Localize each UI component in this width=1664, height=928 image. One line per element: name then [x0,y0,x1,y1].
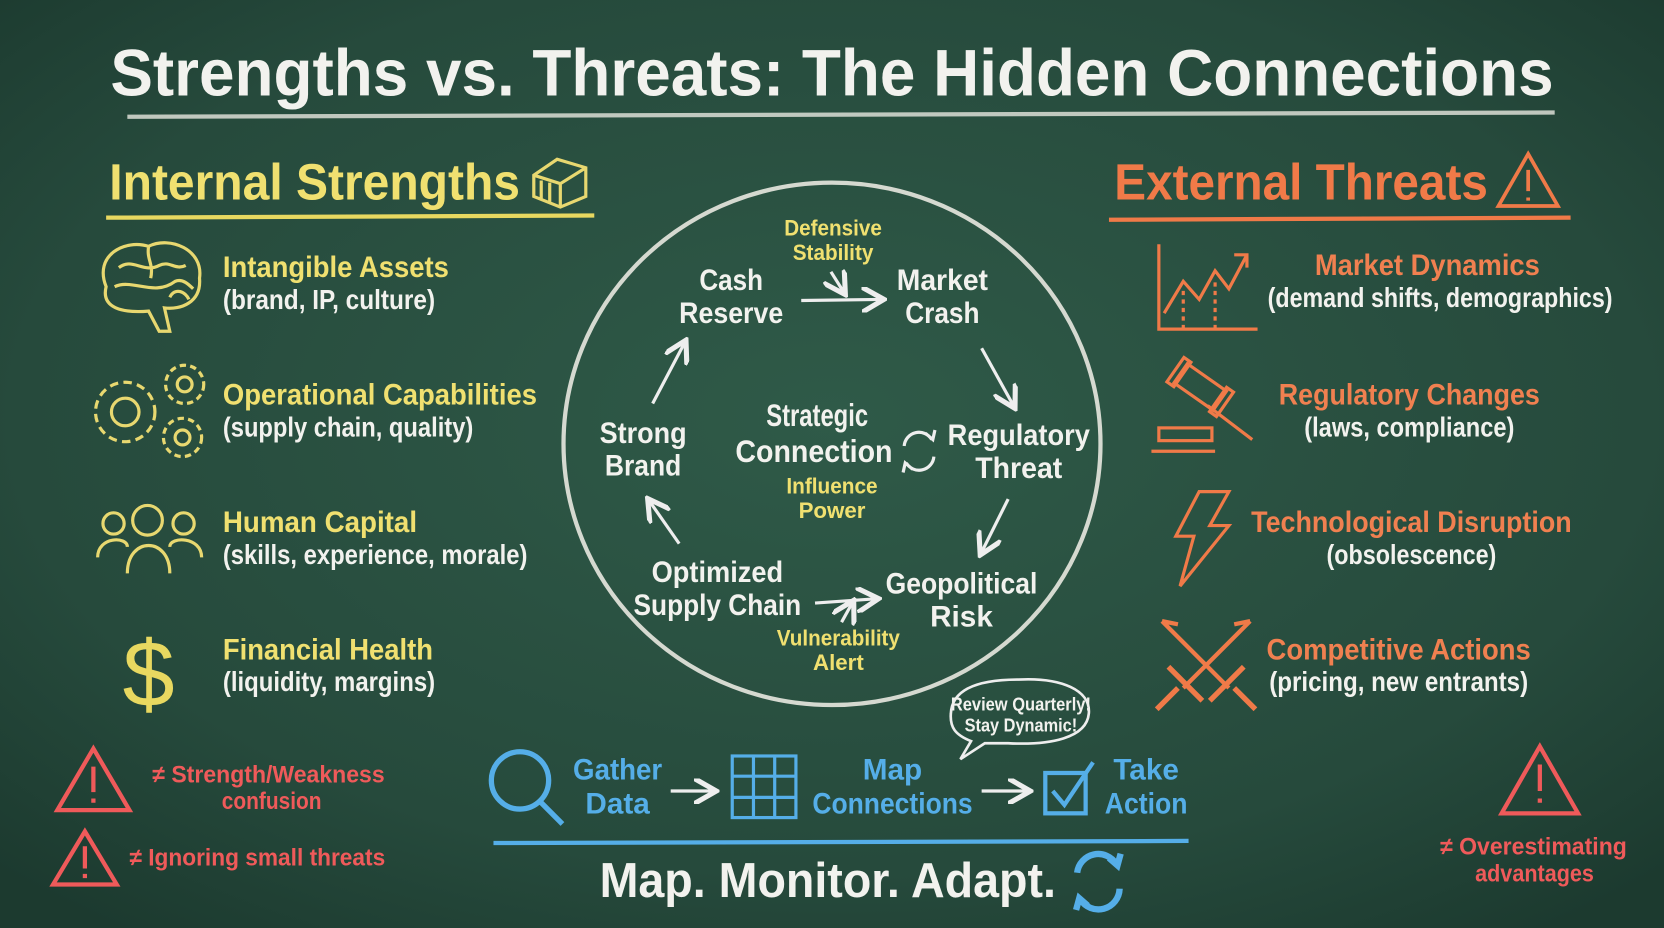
text: market dynamics: Market Dynamics [1315,249,1540,282]
process flow: Connections [812,787,973,820]
callout: review quarterly [951,679,1091,759]
text: competitive actions: Competitive Actions [1267,633,1531,666]
labels: yellow notes: Power [799,498,866,523]
node: market crash [897,264,988,330]
node: optimized supply chain: Optimized [652,556,783,589]
node: optimized supply chain [634,556,801,622]
text: competitive actions [1267,633,1531,697]
icon: swords [1157,621,1255,709]
icon: chart [1159,244,1258,329]
text: operational capabilities [223,379,537,442]
node: regulatory threat [948,419,1090,485]
text: intangible assets [223,251,449,315]
icon: brain [103,243,200,331]
text: confusion warning [152,762,385,815]
text: technological disruption: Technological Disruption [1251,506,1572,539]
text: regulatory changes [1279,379,1540,442]
text: regulatory changes: (laws, compliance) [1304,411,1514,442]
process flow: Data [585,787,650,820]
icon: gavel [1151,357,1252,451]
callout: review quarterly: Stay Dynamic! [965,716,1077,736]
text: financial health: Financial Health [223,633,433,666]
node: cash reserve: Reserve [679,297,783,330]
process flow: Action [1105,787,1188,820]
text: human capital: (skills, experience, morale) [223,539,527,570]
text: technological disruption [1251,506,1572,570]
node: cash reserve [679,264,783,330]
icon: lightning [1176,492,1229,586]
connection circle diagram [564,183,1100,705]
warning right [1440,746,1627,887]
labels: yellow notes: Vulnerability [777,626,900,651]
text: human capital: Human Capital [223,506,417,539]
warning right: ≠ Overestimating [1440,834,1627,861]
process flow: Gather [573,753,663,786]
node: geopolitical risk: Risk [930,600,993,633]
labels: yellow notes: Defensive [784,216,882,241]
text: intangible assets: (brand, IP, culture) [223,284,435,315]
threat items [1151,244,1613,709]
node: strong brand [600,417,687,483]
node: market crash: Crash [905,297,980,330]
text: competitive actions: (pricing, new entrants) [1269,666,1528,697]
process flow: Take [1113,753,1179,786]
icon: magnifier [491,752,562,824]
node: market crash: Market [897,264,988,297]
icon: dollar: $ [123,621,175,726]
text: financial health: (liquidity, margins) [223,666,435,697]
process flow [491,752,1189,843]
text: regulatory changes: Regulatory Changes [1279,379,1540,412]
node: optimized supply chain: Supply Chain [634,589,801,622]
center: strategic connection: Strategic [766,397,868,433]
warning right: advantages [1475,860,1594,887]
icon: people [98,505,202,573]
text: small threats warning: ≠ Ignoring small threats [129,844,385,871]
arrows [649,272,1013,622]
node: regulatory threat: Threat [975,452,1062,485]
icon: gears [96,365,204,457]
node: geopolitical risk: Geopolitical [886,568,1037,601]
node: regulatory threat: Regulatory [948,419,1090,452]
text: technological disruption: (obsolescence) [1327,539,1496,570]
center: strategic connection [735,397,935,472]
text: human capital [223,506,527,570]
node: cash reserve: Cash [699,264,763,297]
labels: yellow notes: Alert [813,650,864,675]
text: confusion warning: confusion [222,788,322,815]
warnings left [53,749,385,884]
labels: yellow notes [777,216,900,675]
node: geopolitical risk [886,568,1037,633]
icon: checkbox [1045,762,1093,813]
node: strong brand: Strong [600,417,687,450]
footer slogan: Map. Monitor. Adapt. [600,854,1056,908]
text: operational capabilities: Operational Capabilities [223,379,537,412]
process flow: Map [863,753,922,786]
heading: external threats: External Threats [1114,154,1488,211]
text: intangible assets: Intangible Assets [223,251,449,284]
labels: yellow notes: Stability [793,240,874,265]
node: strong brand: Brand [605,450,681,483]
callout: review quarterly: Review Quarterly! [951,694,1091,714]
text: confusion warning: ≠ Strength/Weakness [152,762,385,789]
strength items [96,243,537,726]
heading: internal strengths: Internal Strengths [109,154,520,211]
title: Strengths vs. Threats: The Hidden Connections [110,36,1554,110]
labels: yellow notes: Influence [786,474,878,499]
text: operational capabilities: (supply chain, quality) [223,411,473,442]
text: financial health [223,633,435,697]
icon: grid [732,756,796,818]
text: market dynamics [1268,249,1613,313]
center: strategic connection: Connection [735,433,892,469]
